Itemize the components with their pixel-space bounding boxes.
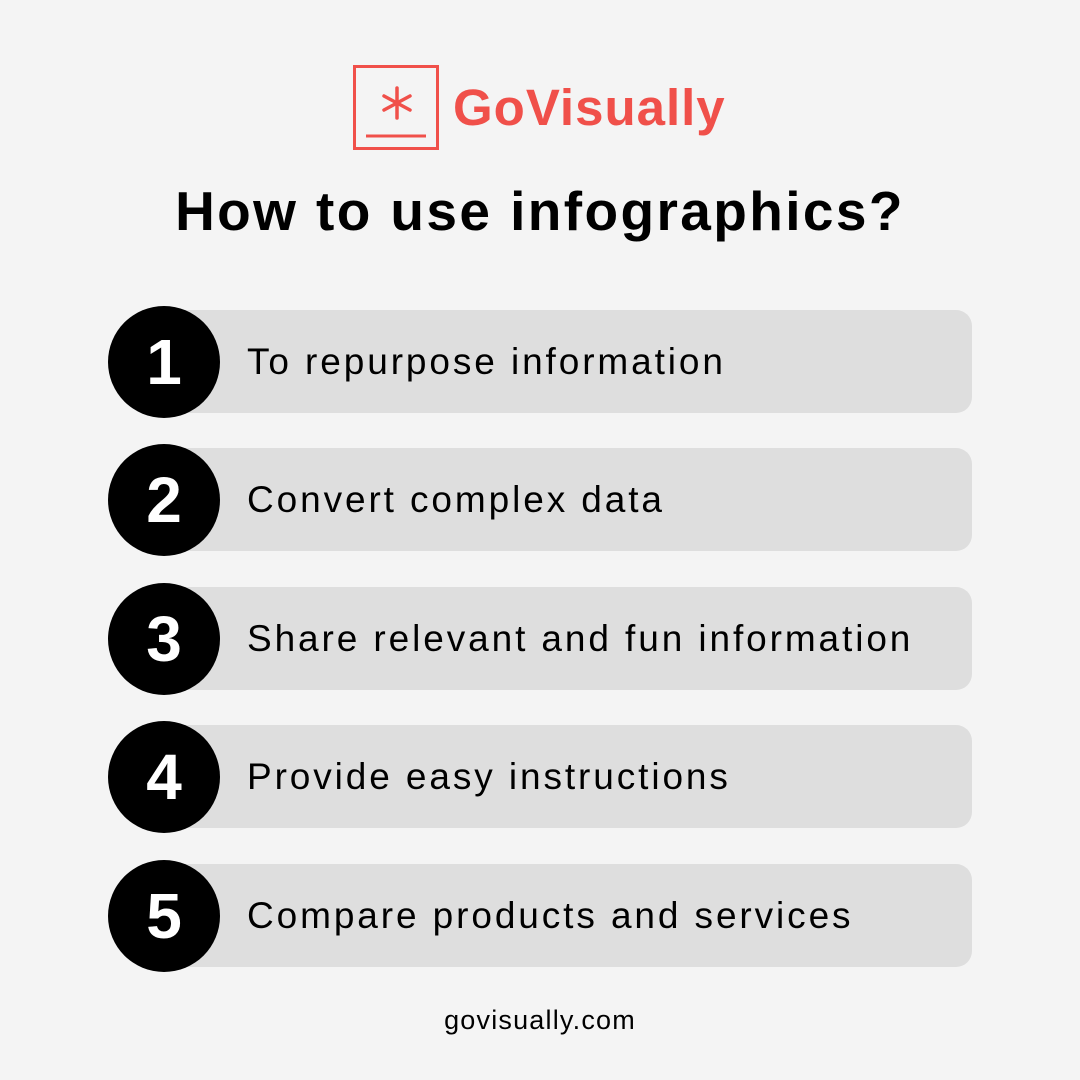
item 1: To repurpose information (247, 341, 726, 382)
item 1 (108, 306, 972, 418)
icon: asterisk box (353, 65, 439, 150)
logo (353, 65, 726, 150)
item 1: 1 (146, 326, 182, 398)
item 5: Compare products and services (247, 895, 853, 936)
item 2: 2 (146, 464, 182, 536)
item 4: Provide easy instructions (247, 756, 731, 797)
item 5: 5 (146, 880, 182, 952)
title: How to use infographics? (175, 180, 905, 242)
item 2 (108, 444, 972, 556)
footer url: govisually.com (444, 1005, 636, 1035)
item 5 (108, 860, 972, 972)
item 3: Share relevant and fun information (247, 618, 913, 659)
item 4: 4 (146, 741, 182, 813)
item 2: Convert complex data (247, 479, 665, 520)
logo text: GoVisually (453, 79, 726, 136)
item 4 (108, 721, 972, 833)
item 3: 3 (146, 603, 182, 675)
item 3 (108, 583, 972, 695)
